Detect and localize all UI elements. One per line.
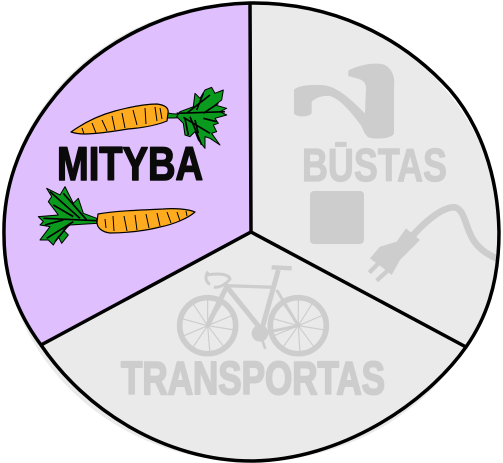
icon: carrot bottom bbox=[38, 187, 195, 245]
icon: bicycle bbox=[180, 267, 326, 354]
heading: būstas: BŪSTAS bbox=[302, 139, 447, 191]
icon: carrot top bbox=[71, 87, 227, 148]
icon: appliance box bbox=[310, 191, 364, 244]
segment dividers bbox=[41, 3, 466, 347]
icon: water tap bbox=[294, 64, 394, 139]
heading: transportas: TRANSPORTAS bbox=[121, 352, 385, 404]
icon: electric plug bbox=[369, 207, 497, 281]
panel: mityba segment bbox=[4, 3, 251, 345]
heading: mityba: MITYBA bbox=[57, 137, 203, 190]
